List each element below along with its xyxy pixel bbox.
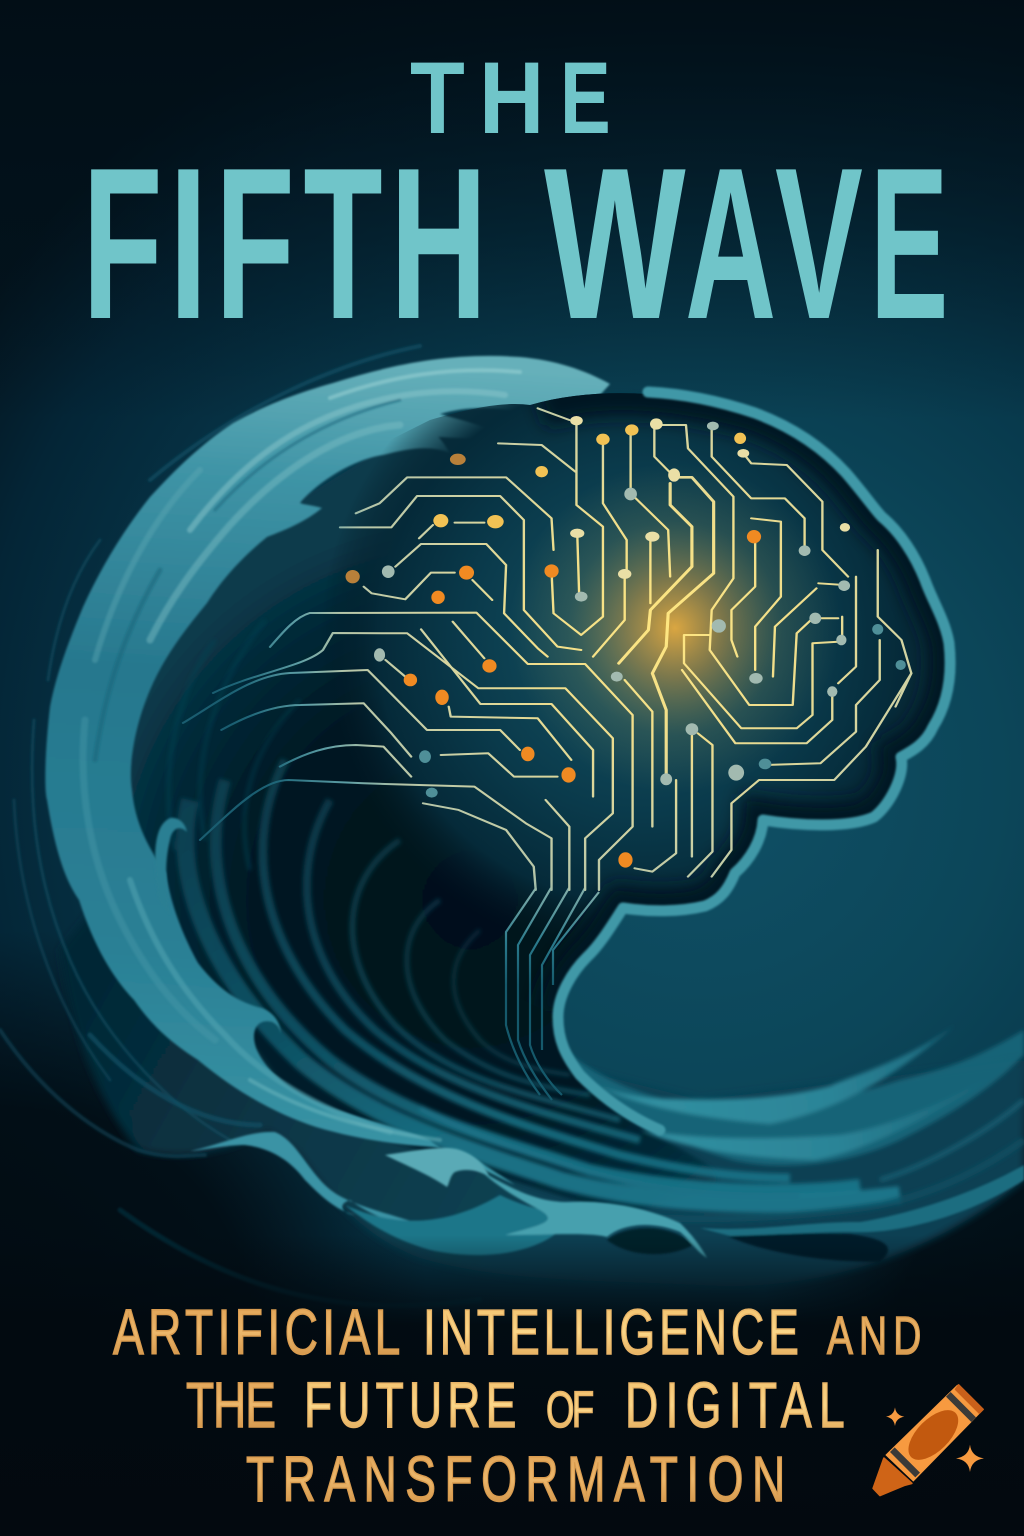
title line: FIFTH WAVE: F [215,123,295,364]
title line: THE [410,42,611,156]
bottom dark band [0,1235,1024,1536]
title line: FIFTH WAVE: T [303,123,383,364]
brain [183,392,950,1130]
title line: FIFTH WAVE [82,122,948,365]
subtitle line 2: THE [186,1370,276,1441]
title line: FIFTH WAVE: V [775,122,863,364]
title line: THE: H [479,42,544,155]
title line: THE: T [410,42,465,155]
sparkle small [886,1407,904,1426]
subtitle line 1: INTELLIGENCE [423,1297,799,1368]
core glow [510,463,840,793]
circuit traces [183,408,911,890]
main wave body [45,356,625,1185]
subtitle line 1: ARTIFICIAL [113,1297,400,1368]
subtitle line 2: FUTURE [304,1370,516,1441]
subtitle line 2: DIGITAL [625,1370,845,1441]
title line: FIFTH WAVE: H [390,124,487,365]
title line: FIFTH WAVE: A [685,124,776,364]
wave brush streaks [83,370,520,1140]
crayon body [885,1385,983,1482]
title line: FIFTH WAVE: F [82,122,162,364]
subtitle [113,1297,921,1515]
subtitle line 3: TRANSFORMATION [246,1444,785,1515]
foam crests and curls [155,818,1024,1262]
subtitle line 1 [113,1297,921,1368]
swell band under the neck [565,1025,1024,1180]
crayon label [900,1402,967,1468]
brain silhouette [300,393,950,1017]
circuit nodes [346,416,906,868]
title line: FIFTH WAVE: W [544,124,686,364]
lower outer sheet [60,900,1024,1286]
dark wave interior [120,393,950,1215]
crayon tip [873,1458,912,1495]
brain outline [558,392,950,1130]
title line: FIFTH WAVE: E [870,123,948,364]
faint outer strokes [0,346,480,1306]
interior curved swells [168,620,1024,1219]
sparkle large [956,1445,984,1472]
crayon bands [890,1392,976,1477]
title [82,42,948,365]
icon: crayon with sparkles [873,1385,984,1495]
wave illustration [0,346,1024,1306]
subtitle line 2: OF [546,1382,594,1438]
subtitle line 1: AND [827,1305,921,1365]
neck traces [506,888,599,1100]
title line: THE: E [560,42,611,156]
subtitle line 2 [186,1370,845,1441]
title line: FIFTH WAVE: I [169,124,208,364]
inner shadow along brain edge [531,393,946,924]
crayon cap [955,1385,983,1413]
